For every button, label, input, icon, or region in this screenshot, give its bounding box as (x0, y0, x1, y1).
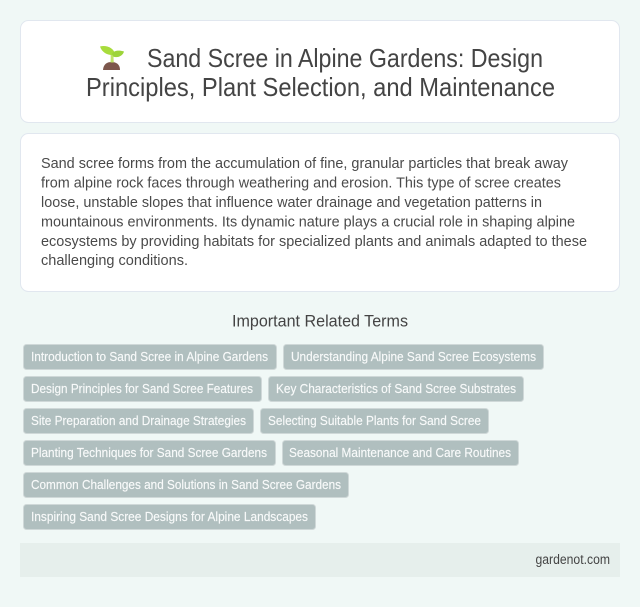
text block: description: Sand scree forms from the accumulation of fine, granular particles that break away (41, 155, 568, 172)
tag (260, 408, 488, 434)
panel: description (20, 134, 620, 292)
tag: Inspiring Sand Scree Designs for Alpine Landscapes (31, 509, 308, 524)
title (86, 43, 555, 102)
tag: Key Characteristics of Sand Scree Substrates (276, 381, 516, 396)
tag (24, 376, 262, 402)
tag (268, 376, 524, 402)
title: Principles, Plant Selection, and Maintenance (86, 72, 555, 102)
tag (24, 440, 276, 466)
tag: Planting Techniques for Sand Scree Gardens (31, 445, 267, 460)
tag (24, 344, 276, 370)
text block: description: challenging conditions. (41, 252, 188, 269)
panel: header card (20, 20, 620, 122)
tag list (24, 344, 544, 530)
text block: description: loose, unstable slopes that influence water drainage and vegetation patterns in (41, 194, 542, 211)
tag (284, 344, 544, 370)
tag: Site Preparation and Drainage Strategies (31, 413, 246, 428)
tag: Understanding Alpine Sand Scree Ecosystems (291, 349, 536, 364)
tag (282, 440, 518, 466)
text block: description: from alpine rock faces through weathering and erosion. This type of scree creates (41, 174, 561, 192)
text block: description: mountainous environments. Its dynamic nature plays a crucial role in shaping alpine (41, 214, 575, 230)
footer (20, 543, 620, 577)
text block: description: ecosystems by providing habitats for specialized plants and animals adapted to these (41, 233, 587, 250)
tag: Seasonal Maintenance and Care Routines (289, 445, 511, 460)
tag: Common Challenges and Solutions in Sand Scree Gardens (31, 477, 341, 492)
tag (24, 472, 348, 498)
icon: seedling (100, 46, 124, 70)
tag: Introduction to Sand Scree in Alpine Gardens (31, 349, 268, 364)
footer: gardenot.com (536, 552, 610, 567)
text block: description (41, 155, 587, 269)
tag: Selecting Suitable Plants for Sand Scree (268, 413, 481, 428)
tag: Design Principles for Sand Scree Features (31, 381, 253, 396)
tag (24, 408, 254, 434)
title: Sand Scree in Alpine Gardens: Design (147, 43, 543, 73)
tag (24, 504, 316, 530)
heading: related terms: Important Related Terms (232, 312, 408, 330)
